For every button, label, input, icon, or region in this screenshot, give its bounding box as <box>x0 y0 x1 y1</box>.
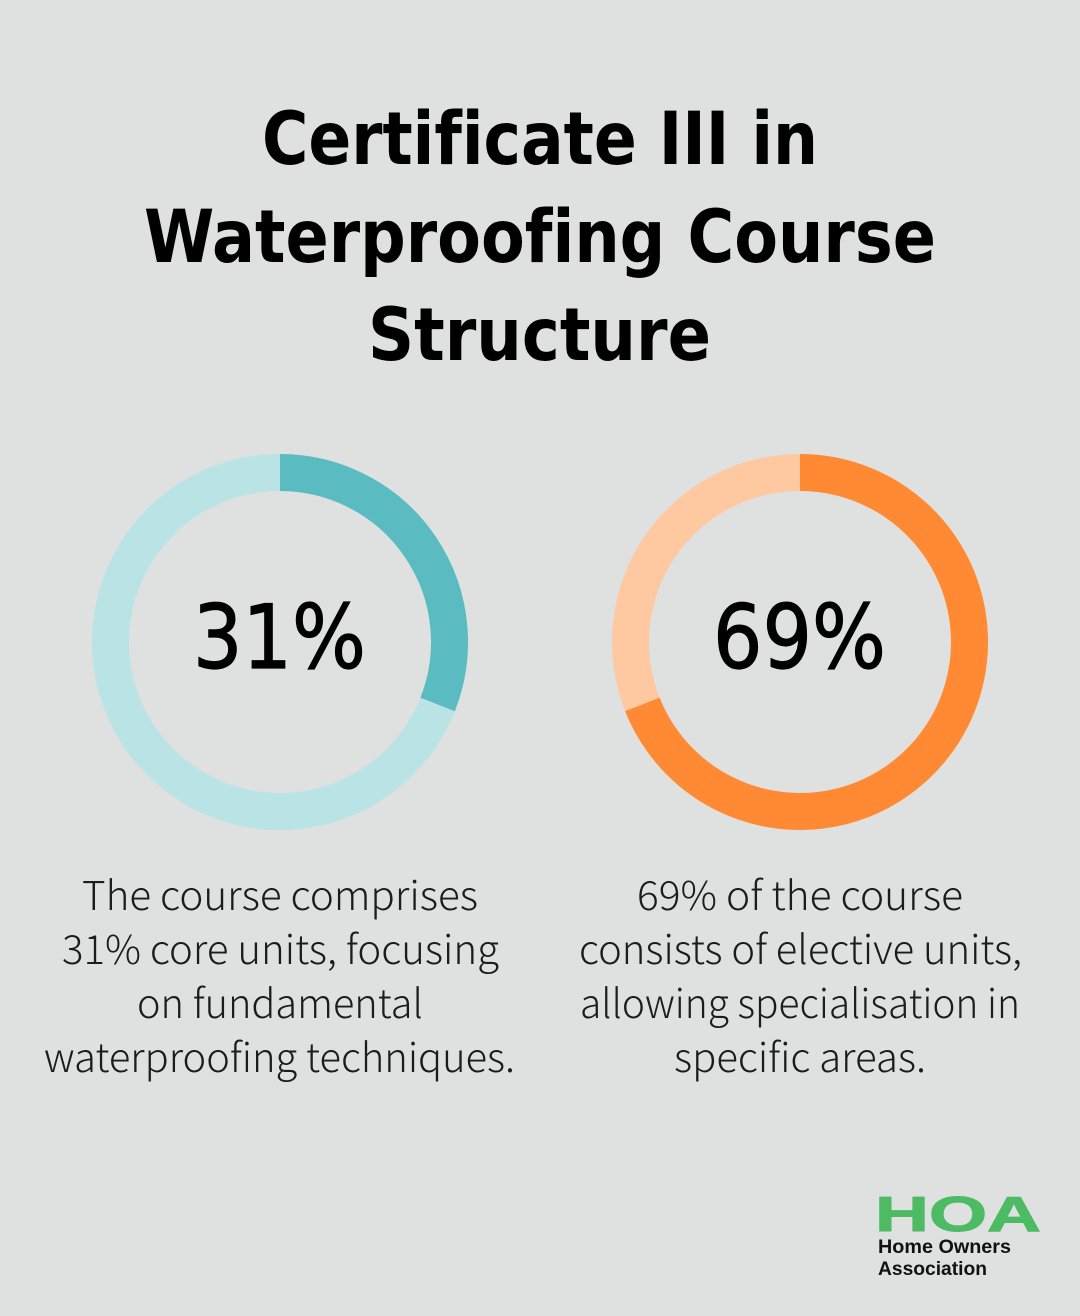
text block: elective units description: specific areas. <box>674 1026 926 1084</box>
donut chart: 31%: 31% <box>193 586 366 689</box>
text block: core units description: The course comprises <box>82 864 478 922</box>
logo: HOA Home Owners Association: Home Owners <box>878 1237 1011 1258</box>
title: Waterproofing Course <box>144 195 936 280</box>
logo: HOA Home Owners Association: HOA <box>875 1188 1041 1242</box>
donut chart: 31% <box>110 472 450 812</box>
logo: HOA Home Owners Association <box>875 1188 1041 1280</box>
text block: elective units description: allowing specialisation in <box>580 972 1020 1030</box>
logo: HOA Home Owners Association: Association <box>878 1259 987 1280</box>
donut chart: 69% <box>630 472 970 812</box>
text block: core units description: 31% core units, focusing <box>62 918 499 976</box>
text block: elective units description <box>579 864 1022 1084</box>
text block: core units description <box>44 864 515 1084</box>
title: Structure <box>368 293 711 378</box>
panel: elective units <box>579 472 1022 1084</box>
text block: core units description: waterproofing techniques. <box>44 1026 515 1084</box>
title <box>144 97 936 378</box>
donut chart: 69%: 69% <box>713 586 886 689</box>
panel: core units <box>44 472 515 1084</box>
title: Certificate III in <box>262 97 818 182</box>
text block: elective units description: 69% of the course <box>637 864 963 922</box>
text block: core units description: on fundamental <box>137 972 423 1030</box>
text block: elective units description: consists of elective units, <box>579 918 1022 976</box>
